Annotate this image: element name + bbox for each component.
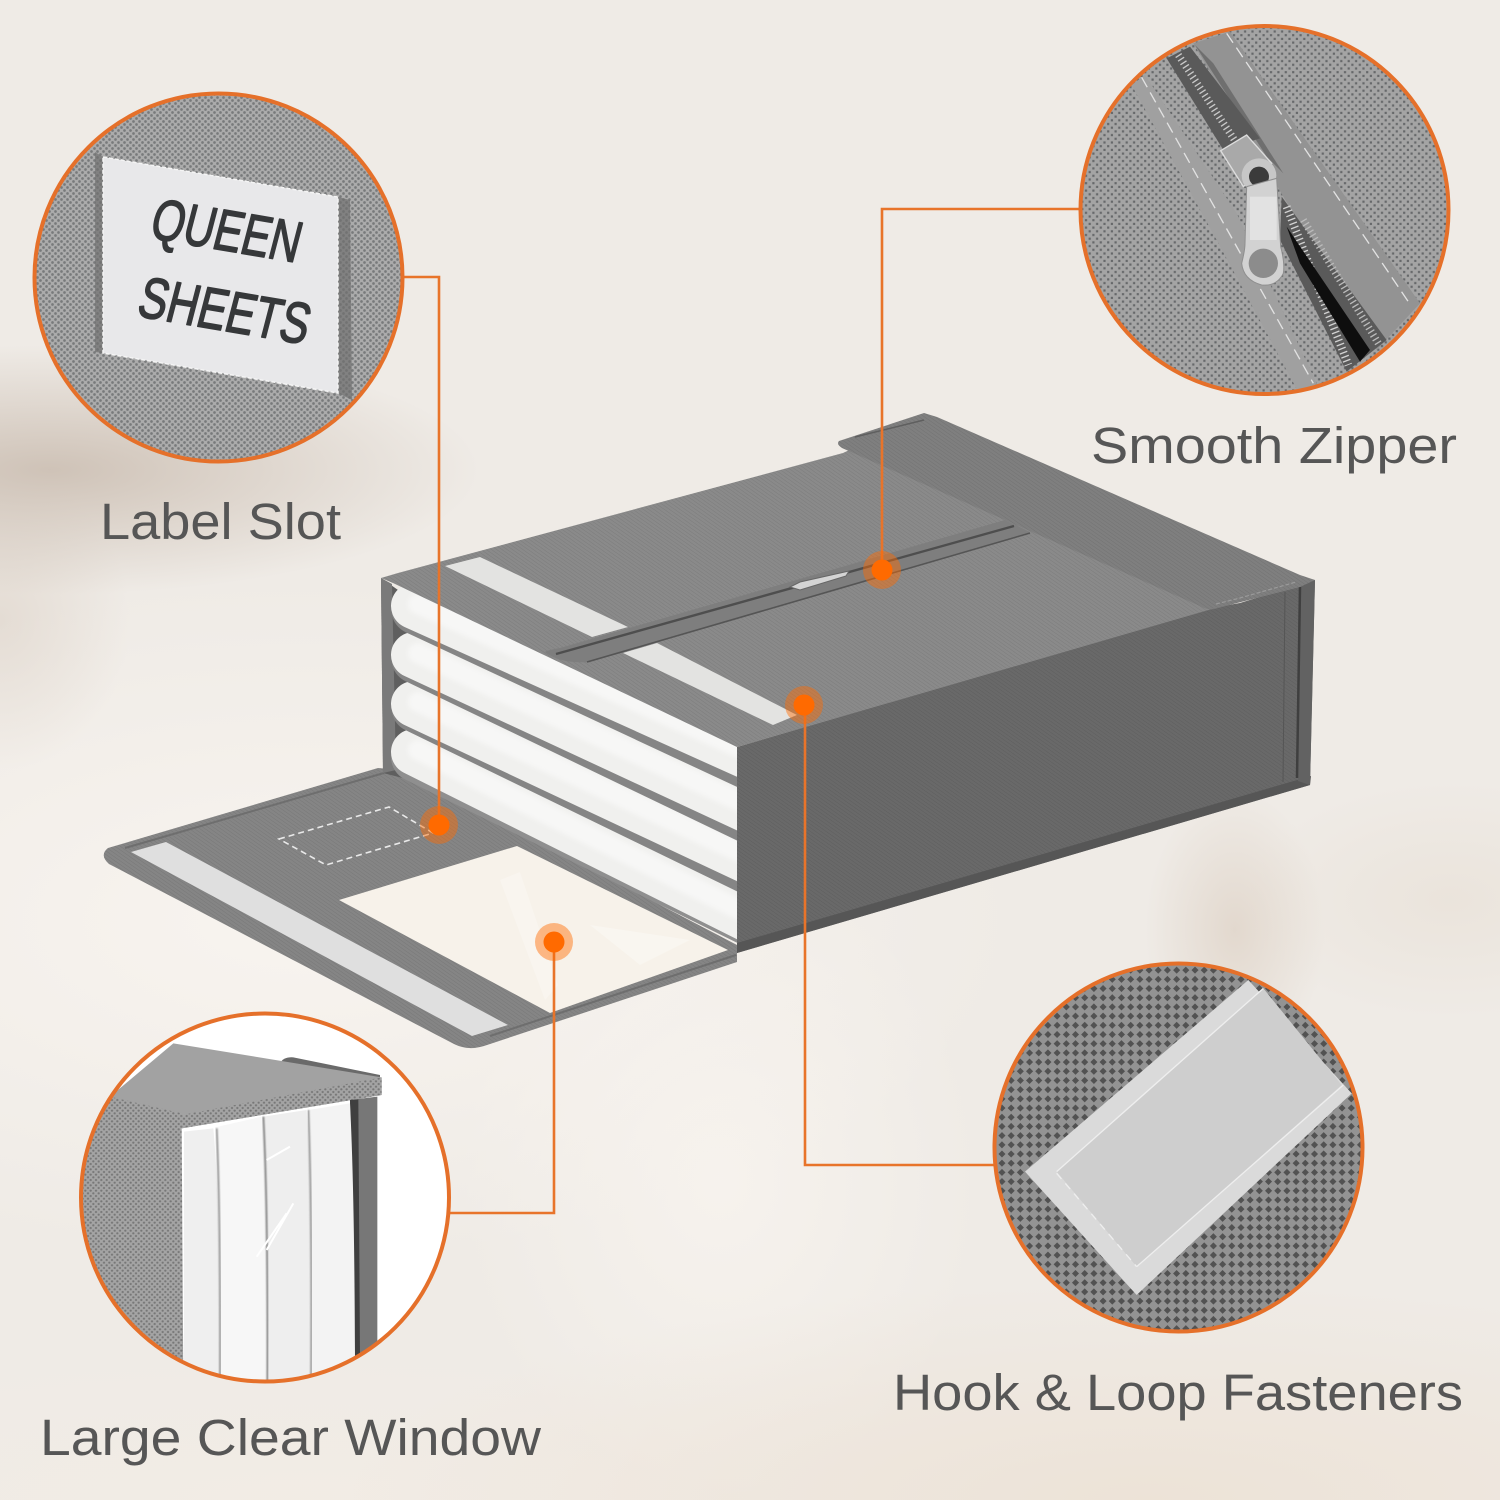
hook and loop strip on flap [131, 842, 508, 1036]
box top face [381, 413, 1315, 747]
open front flap with window [104, 768, 737, 1048]
callout dot: zipper [863, 551, 901, 589]
heading: smooth zipper: Smooth Zipper [1091, 417, 1457, 474]
product: open storage bag with sheets [104, 413, 1315, 1048]
zipper tapes [1132, 32, 1420, 395]
closing strap [838, 413, 1315, 609]
heading: hook and loop fasteners: Hook & Loop Fasteners [893, 1364, 1463, 1421]
label card: SHEETS [132, 265, 318, 357]
label card [103, 157, 338, 393]
panel: smooth zipper detail [1080, 26, 1448, 395]
panel: hook and loop detail [994, 964, 1362, 1332]
left side fabric [83, 1113, 184, 1360]
back wall [350, 1097, 377, 1360]
zipper [545, 520, 1030, 662]
callout dot: hook and loop [785, 686, 823, 724]
clear window [339, 846, 728, 1013]
callout dot: clear window [535, 923, 573, 961]
top of box [110, 1043, 382, 1128]
dashed label slot outline [279, 807, 433, 865]
panel: large clear window detail [73, 1014, 449, 1400]
strap behind [282, 1057, 380, 1078]
hook and loop strips on top [445, 557, 628, 637]
heading: label slot: Label Slot [100, 493, 341, 550]
folded white sheets [414, 604, 780, 936]
heading: large clear window: Large Clear Window [40, 1409, 541, 1466]
hook and loop strip [1025, 980, 1352, 1295]
box right side face [737, 580, 1315, 953]
connector lines [403, 209, 1081, 1213]
zipper teeth [1167, 47, 1387, 372]
zipper pull [1221, 135, 1284, 285]
callout dot: label slot [420, 806, 458, 844]
label card: QUEEN [145, 187, 309, 275]
sheets through window [184, 1103, 355, 1400]
zipper slider [790, 571, 849, 590]
panel: label slot detail [34, 94, 402, 462]
back wall of the open end [381, 578, 450, 790]
